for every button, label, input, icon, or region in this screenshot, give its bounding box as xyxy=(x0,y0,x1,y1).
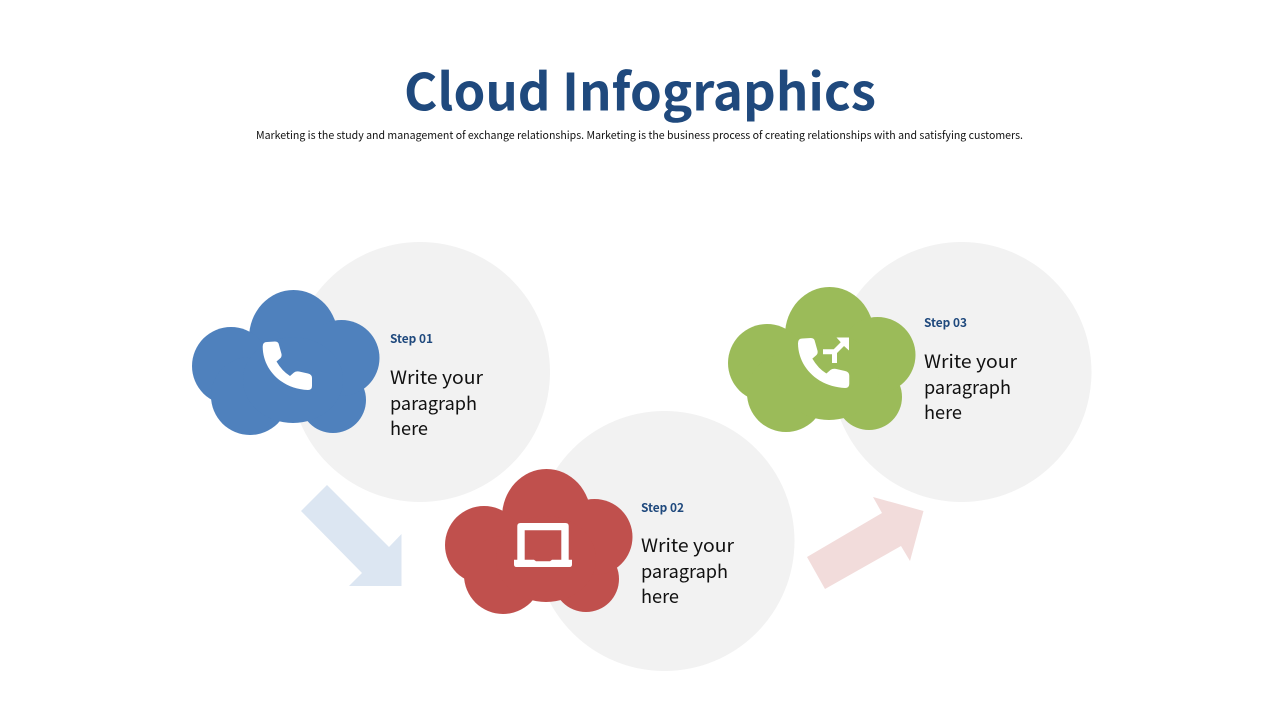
subtitle text: Marketing is the study and management of exchange relationships. Marketing is the business process of creating relationships with and satisfying customers. xyxy=(256,127,1023,143)
step 01 blue cloud xyxy=(192,290,380,435)
title: Cloud Infographics xyxy=(404,52,876,126)
step 02 paragraph: Write your xyxy=(641,532,735,558)
step 03 paragraph: Write your xyxy=(924,348,1018,374)
step 01 paragraph xyxy=(390,364,484,441)
panel: step 02 background circle xyxy=(534,411,794,671)
panel: step 01 background circle xyxy=(290,242,550,502)
panel: step 03 background circle xyxy=(832,242,1092,502)
step 01 paragraph: Write your xyxy=(390,364,484,390)
step 03 paragraph xyxy=(924,348,1018,425)
step 03 paragraph: here xyxy=(924,399,962,425)
step 01 paragraph: here xyxy=(390,415,428,441)
step 01 paragraph: paragraph xyxy=(390,390,477,416)
arrow: blue pointing down-right xyxy=(301,485,402,586)
arrow: pink pointing up-right xyxy=(807,497,924,589)
step 02 red cloud xyxy=(445,469,632,614)
step 02 group xyxy=(445,469,735,614)
step 02 paragraph: here xyxy=(641,583,679,609)
step 01 group xyxy=(192,290,484,441)
step 02 label: Step 02 xyxy=(641,499,684,516)
icon: phone with split arrow xyxy=(798,338,849,388)
step 02 paragraph xyxy=(641,532,735,609)
icon: phone xyxy=(263,342,312,390)
step 03 paragraph: paragraph xyxy=(924,374,1011,400)
step 01 label: Step 01 xyxy=(390,330,433,347)
step 03 group xyxy=(728,287,1018,432)
icon: laptop xyxy=(514,523,572,567)
step 02 paragraph: paragraph xyxy=(641,558,728,584)
step 03 label: Step 03 xyxy=(924,314,967,331)
step 03 green cloud xyxy=(728,287,916,432)
